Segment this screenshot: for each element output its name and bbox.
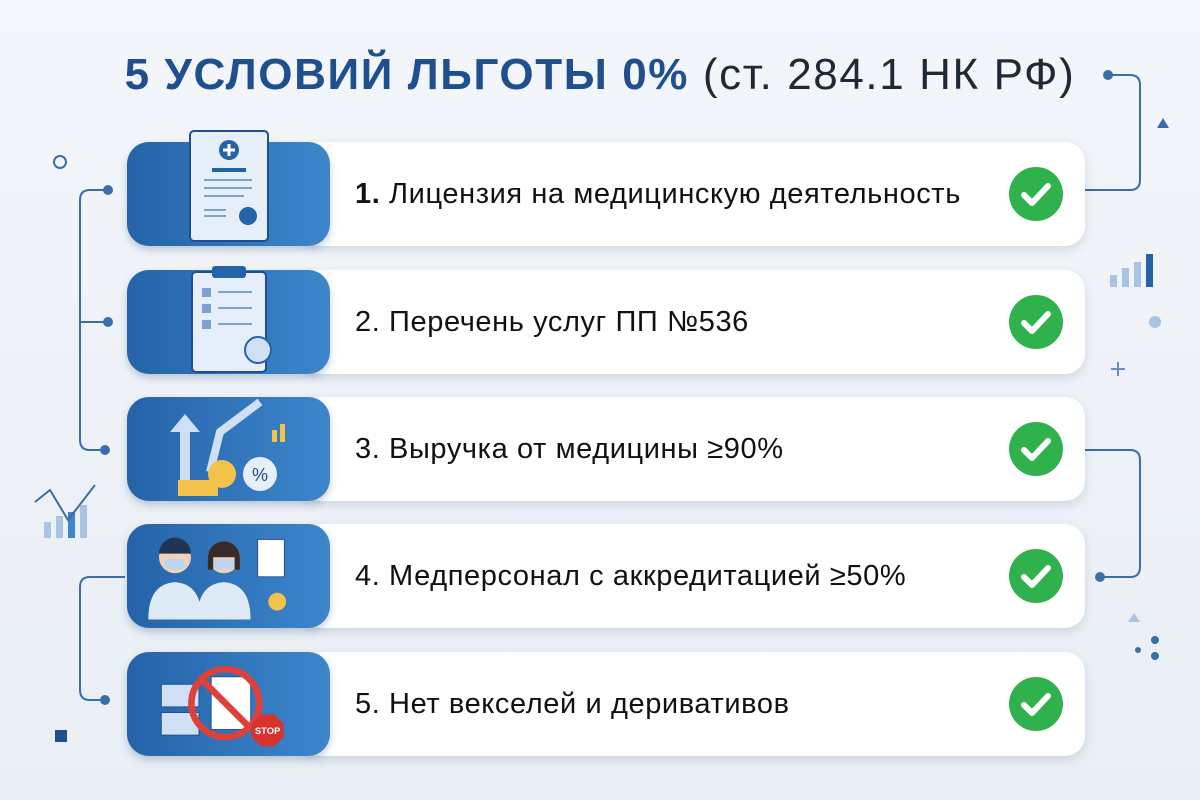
icon: clipboard — [191, 266, 272, 373]
icon: no bills stop — [160, 666, 284, 746]
check 5 — [1009, 677, 1063, 731]
row 3 — [123, 396, 1088, 510]
check 3 — [1009, 422, 1063, 476]
check 1 — [1009, 167, 1063, 221]
text 3: 3. Выручка от медицины ≥90% — [355, 433, 784, 465]
row 5 — [123, 652, 1088, 764]
icon: revenue growth — [170, 398, 285, 496]
row 2 — [123, 266, 1088, 382]
icon: license document — [189, 130, 269, 242]
text 1: 1. Лицензия на медицинскую деятельность — [355, 178, 961, 210]
check 4 — [1009, 549, 1063, 603]
check 2 — [1009, 295, 1063, 349]
text 5: 5. Нет векселей и деривативов — [355, 688, 790, 720]
icon: revenue growth: % — [252, 465, 268, 485]
text 4: 4. Медперсонал с аккредитацией ≥50% — [355, 560, 906, 592]
row 1 — [123, 130, 1088, 254]
icon: medical staff — [148, 538, 286, 620]
title: 5 УСЛОВИЙ ЛЬГОТЫ 0% (ст. 284.1 НК РФ) — [125, 50, 1075, 99]
icon: no bills stop: STOP — [255, 725, 280, 736]
text 2: 2. Перечень услуг ПП №536 — [355, 306, 749, 338]
row 4 — [123, 524, 1088, 636]
